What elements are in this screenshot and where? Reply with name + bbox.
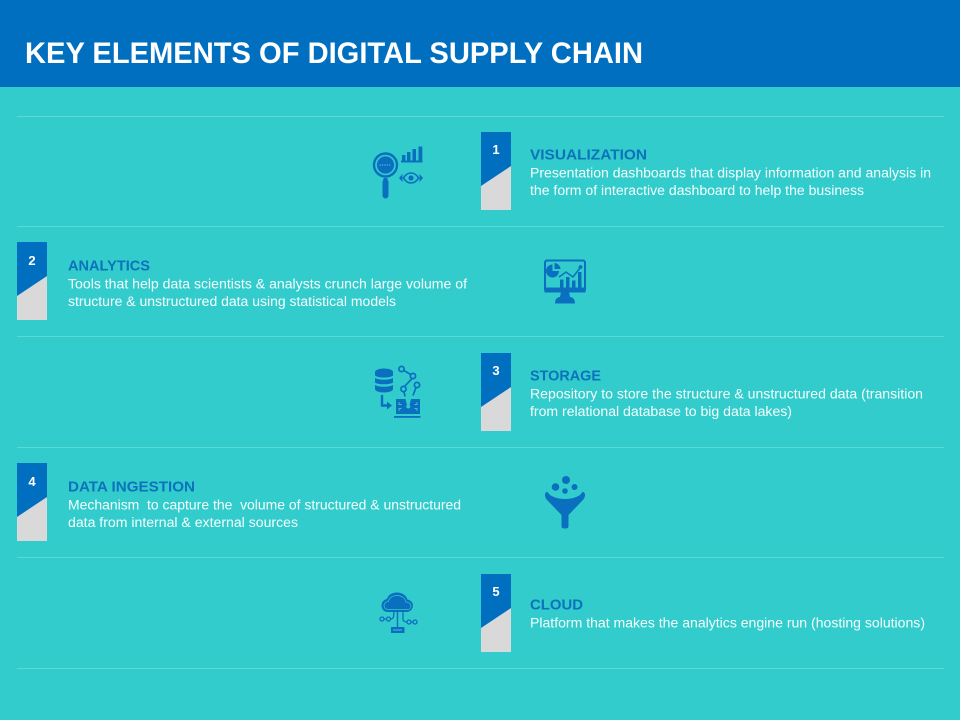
text: visualization description: the form of interactive dashboard to help the business: [530, 183, 864, 198]
text: analytics description: Tools that help data scientists & analysts crunch large volume of: [68, 276, 467, 292]
panel: storage: [375, 353, 923, 431]
title banner: [0, 0, 960, 87]
text: visualization description: Presentation dashboards that display information and analysis in: [530, 166, 931, 180]
panel: visualization: [374, 132, 931, 210]
badge 2: [17, 242, 47, 320]
title: KEY ELEMENTS OF DIGITAL SUPPLY CHAIN: [25, 37, 643, 70]
icon: dashboard monitor: [544, 260, 586, 304]
icon: database to data lake: [375, 366, 420, 418]
badge 3: 3: [492, 363, 500, 378]
badge 3: [481, 353, 511, 431]
heading: data ingestion: DATA INGESTION: [68, 478, 195, 496]
heading: cloud: CLOUD: [530, 596, 583, 614]
heading: analytics: ANALYTICS: [68, 258, 150, 274]
text: cloud description: Platform that makes the analytics engine run (hosting solutions): [530, 616, 925, 630]
badge 1: 1: [492, 142, 500, 157]
badge 5: [481, 574, 511, 652]
icon: magnifier with bars and eye: [374, 146, 423, 199]
text: data ingestion description: data from internal & external sources: [68, 515, 298, 530]
panel: data ingestion: [17, 463, 585, 541]
icon: funnel: [545, 476, 585, 528]
heading: storage: STORAGE: [530, 368, 601, 384]
text: data ingestion description: Mechanism to capture the volume of structured & unstructured: [68, 498, 461, 512]
icon: cloud network: [380, 592, 417, 633]
badge 1: [481, 132, 511, 210]
panel: cloud: [380, 574, 925, 652]
panel: analytics: [17, 242, 586, 320]
text: storage description: Repository to store the structure & unstructured data (transition: [530, 386, 923, 402]
badge 4: [17, 463, 47, 541]
badge 5: 5: [492, 584, 500, 599]
text: analytics description: structure & unstructured data using statistical models: [68, 294, 396, 309]
badge 2: 2: [28, 253, 36, 268]
text: storage description: from relational database to big data lakes): [530, 404, 792, 419]
heading: visualization: VISUALIZATION: [530, 146, 647, 164]
badge 4: 4: [28, 474, 36, 489]
